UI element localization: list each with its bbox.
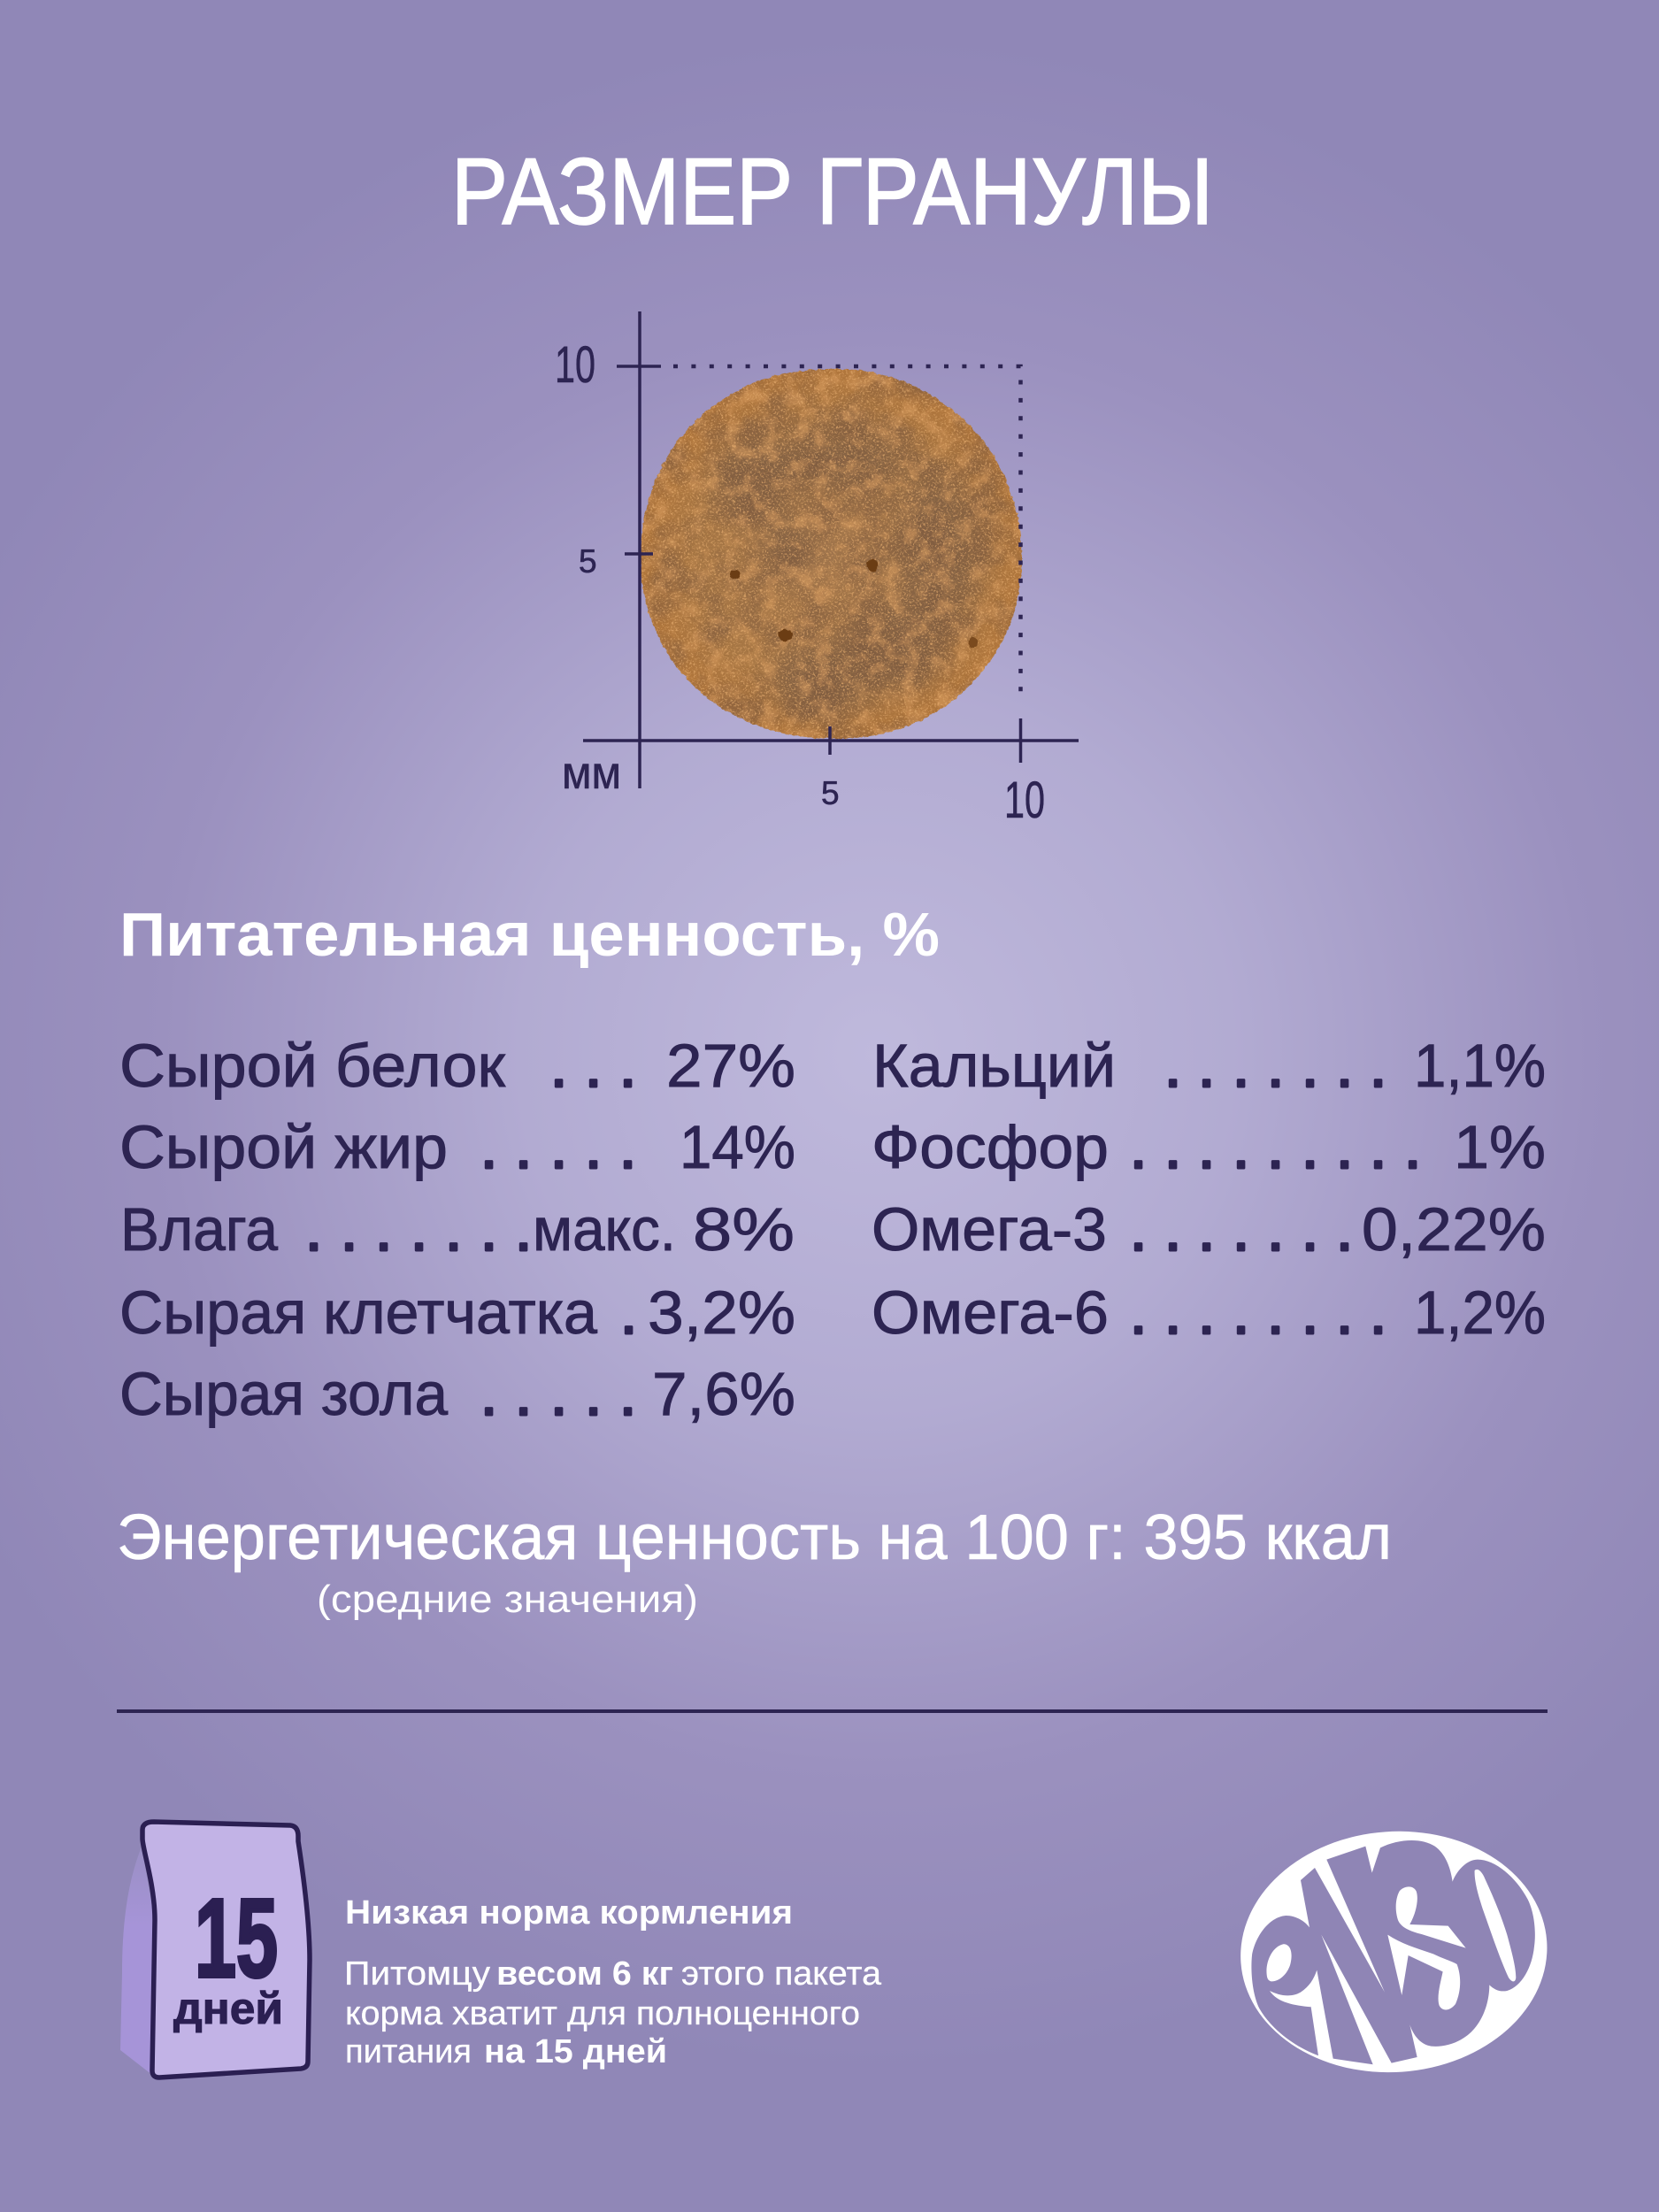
energy note: (средние значения)	[317, 1578, 698, 1621]
row: ash	[119, 1360, 795, 1428]
heading: nutrition: Питательная ценность, %	[119, 900, 940, 969]
row: omega-3: .......	[1130, 1195, 1353, 1263]
bag number: 15	[195, 1876, 278, 2001]
chart: kibble size diagram	[555, 311, 1079, 829]
row: fat: Сырой жир	[119, 1113, 448, 1181]
axis lines and ticks	[583, 311, 1079, 788]
row: protein: 27%	[666, 1032, 795, 1100]
feeding rate line 1: Питомцу	[344, 1955, 490, 1993]
row: phosphorus	[872, 1113, 1546, 1181]
row: ash: Сырая зола	[119, 1360, 449, 1428]
row: calcium: Кальций	[872, 1032, 1116, 1100]
feeding rate line 3	[345, 2033, 667, 2070]
row: calcium: 1,1%	[1414, 1032, 1546, 1100]
row: omega-6: Омега-6	[872, 1279, 1109, 1347]
row: phosphorus: .........	[1130, 1113, 1421, 1181]
row: fat: 14%	[680, 1113, 795, 1181]
axis labels: 10	[555, 336, 595, 394]
row: omega-3: Омега-3	[872, 1195, 1107, 1263]
axis labels: 5	[579, 543, 597, 580]
icon: food bag	[120, 1822, 310, 2078]
row: omega-6: 1,2%	[1414, 1279, 1546, 1347]
row: phosphorus: Фосфор	[872, 1113, 1109, 1181]
feeding rate line 3: питания	[345, 2033, 472, 2070]
feeding rate line 2: корма хватит для полноценного	[345, 1995, 860, 2032]
feeding rate heading: Низкая норма кормления	[345, 1894, 793, 1932]
row: protein: ...	[550, 1032, 636, 1100]
row: omega-6: ........	[1130, 1279, 1386, 1347]
row: calcium	[872, 1032, 1546, 1100]
axis labels: мм	[562, 748, 621, 799]
row: fat: .....	[480, 1113, 636, 1181]
row: moisture: 8%	[693, 1195, 795, 1263]
row: fibre: 3,2%	[648, 1279, 795, 1347]
row: moisture: Влага	[120, 1195, 279, 1263]
row: protein: Сырой белок	[119, 1032, 506, 1100]
feeding rate line 1: этого пакета	[681, 1955, 882, 1993]
row: moisture: .......	[305, 1195, 532, 1263]
axis labels: 10	[1004, 772, 1045, 829]
feeding rate line 1: весом 6 кг	[496, 1955, 673, 1993]
bag front	[142, 1822, 310, 2078]
row: omega-3: 0,22%	[1362, 1195, 1546, 1263]
feeding rate line 1	[344, 1955, 882, 1993]
axis labels	[555, 336, 1045, 829]
energy value: Энергетическая ценность на 100 г: 395 ккал	[117, 1502, 1392, 1573]
bag gusset	[120, 1847, 159, 2075]
row: omega-3	[872, 1195, 1546, 1263]
row: fibre: .	[620, 1279, 637, 1347]
feeding rate line 3: на 15 дней	[484, 2033, 667, 2070]
row: protein	[119, 1032, 795, 1100]
row: moisture: макс.	[533, 1195, 676, 1263]
title: РАЗМЕР ГРАНУЛЫ	[451, 138, 1213, 244]
row: ash: .....	[480, 1360, 636, 1428]
nutrition table: right column	[872, 1032, 1546, 1347]
row: moisture	[120, 1195, 795, 1263]
row: fibre: Сырая клетчатка	[119, 1279, 598, 1347]
photo: kibble pellet	[633, 363, 1031, 748]
feeding rate text	[344, 1894, 882, 2070]
axis labels: 5	[821, 775, 840, 811]
row: omega-6	[872, 1279, 1546, 1347]
row: fat	[119, 1113, 795, 1181]
nutrition table: left column	[119, 1032, 795, 1428]
logo: brand emblem	[1233, 1821, 1555, 2083]
row: phosphorus: 1%	[1454, 1113, 1546, 1181]
row: ash: 7,6%	[652, 1360, 795, 1428]
row: calcium: .......	[1164, 1032, 1386, 1100]
bag unit: дней	[173, 1984, 283, 2033]
